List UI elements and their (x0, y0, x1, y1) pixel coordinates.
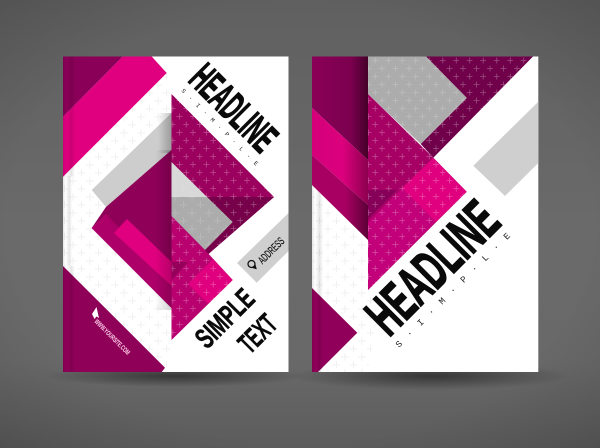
patterned magenta triangle (368, 94, 467, 290)
left subheading: S · I · M · P · L · E (180, 87, 260, 168)
dark magenta diamond (92, 150, 172, 308)
patterned dark plum panel (421, 56, 533, 158)
grey diagonal band (92, 113, 172, 207)
spine pink band (312, 108, 368, 205)
spine dark plum band (312, 56, 368, 160)
page shadows (45, 362, 570, 390)
right-facing patterned triangle (172, 94, 274, 340)
address label: ADDRESS (256, 236, 287, 267)
spine magenta band (312, 155, 368, 240)
bottom left plum triangle (312, 288, 357, 372)
dark plum corner triangle (63, 56, 123, 117)
white plus pattern (63, 73, 172, 372)
pink diagonal band (63, 56, 167, 177)
address label (237, 213, 288, 283)
grey diamond inside triangle (172, 162, 207, 197)
pink inner band (114, 219, 172, 286)
website link (92, 307, 131, 357)
left brochure page (63, 55, 288, 372)
website link: WWW.YOURSITE.COM (93, 318, 131, 357)
white plus pattern (312, 185, 380, 372)
right brochure page (312, 56, 538, 372)
simple text block: TEXT (232, 308, 284, 360)
icon: location pin (247, 259, 259, 272)
right headline: HEADLINE (353, 188, 511, 346)
simple text block: SIMPLE (189, 283, 261, 355)
right subheading: S · I · M · P · L · E (394, 231, 513, 350)
grey diagonal band (473, 102, 538, 196)
bottom left plum block (63, 266, 165, 372)
left headline: HEADLINE (181, 55, 287, 161)
patterned grey panel (368, 56, 467, 144)
simple text block (189, 283, 284, 360)
icon: cursor arrow (92, 307, 99, 319)
